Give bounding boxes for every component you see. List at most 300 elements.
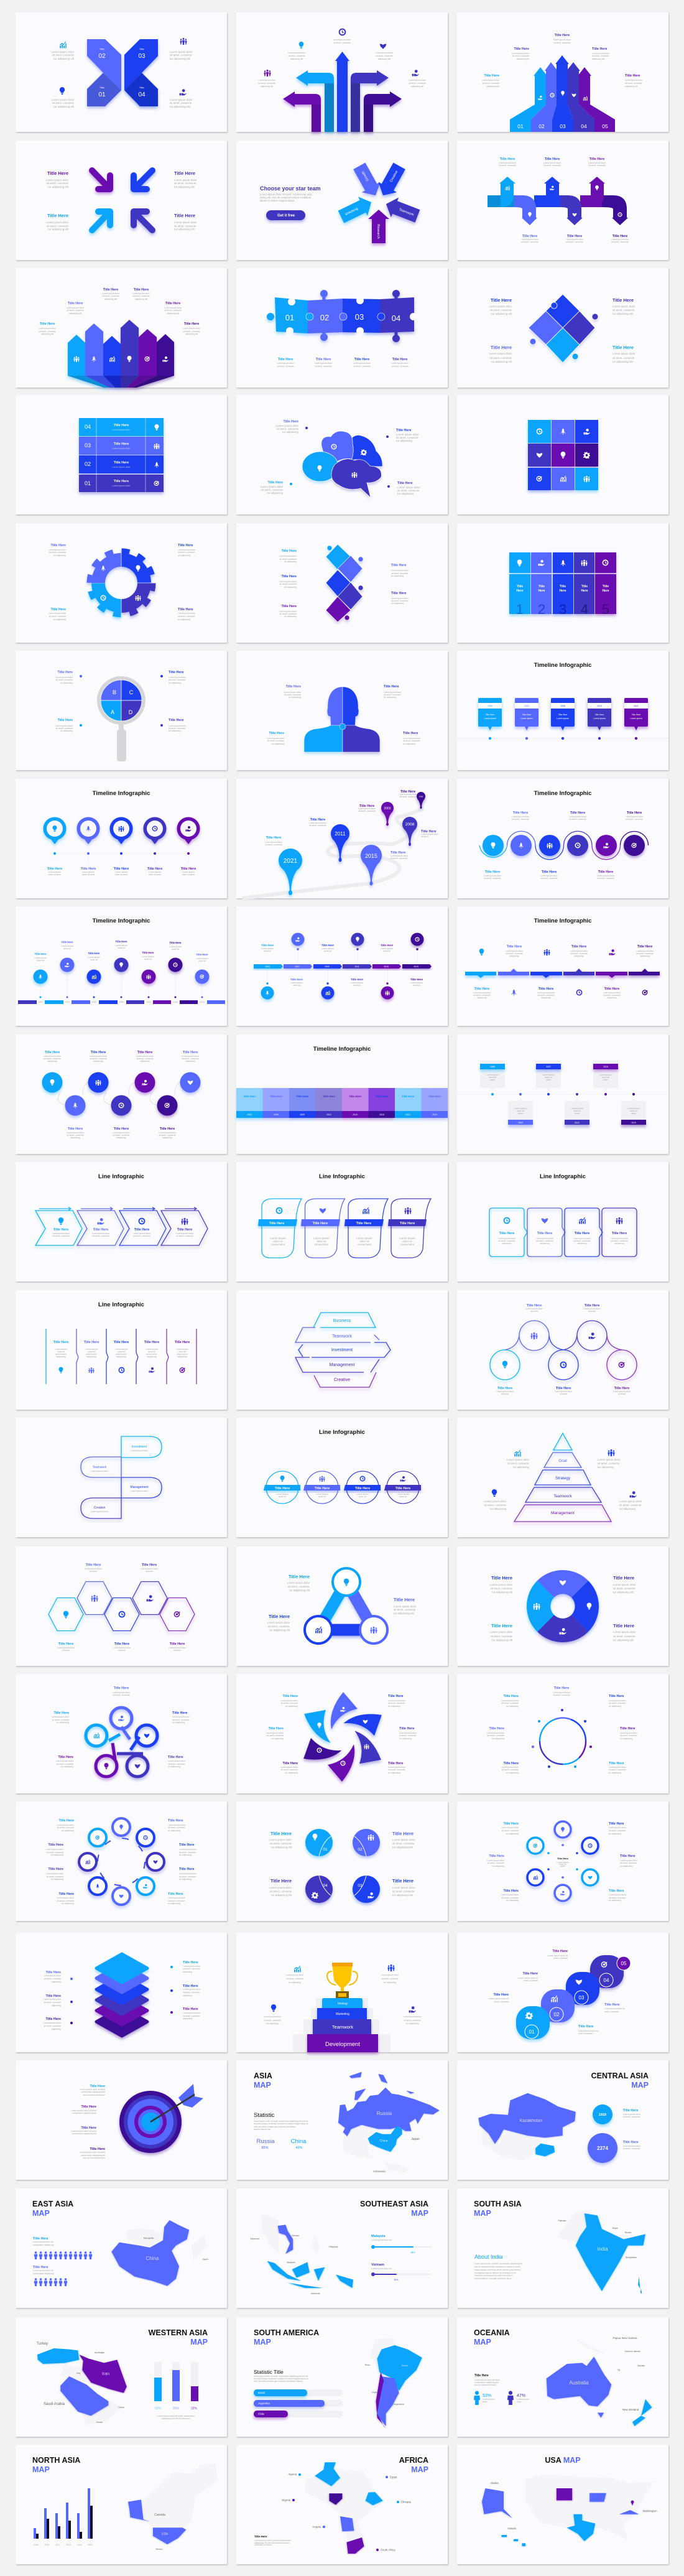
cards	[478, 698, 648, 730]
text block: tur adipiscing elit	[174, 185, 195, 188]
icon: handshake	[380, 44, 386, 49]
map labels: Ethiopia	[401, 2501, 411, 2503]
text block: Title Here	[178, 544, 193, 547]
text blocks: Lorem ipsum dolor	[487, 1732, 505, 1734]
band titles: Title Here	[269, 1222, 284, 1225]
text blocks: sit amet, consecte	[609, 1702, 626, 1704]
text blocks: Lorem ipsum dolor	[588, 162, 606, 164]
map labels: Solomon Islands	[624, 2350, 640, 2353]
map labels: Egypt	[390, 2476, 397, 2478]
text blocks: Title Here	[181, 867, 196, 871]
card text: 2021	[634, 705, 639, 707]
map labels: China	[146, 2256, 159, 2261]
icons	[266, 937, 420, 995]
text blocks: Lorem ipsum dolor	[284, 691, 302, 694]
text block: Lorem ipsum dolor	[489, 305, 512, 308]
text blocks: sit amet, consecte	[609, 1830, 626, 1832]
text blocks: Lorem ipsum dolor	[52, 1716, 70, 1718]
cards	[480, 1061, 646, 1128]
text blocks: sit amet, consecte	[309, 824, 326, 827]
text block: Title Here	[484, 74, 499, 78]
pill text: Lorem ipsum dolor	[91, 1510, 109, 1513]
statistic text: ullamco laboris nisi	[254, 2128, 270, 2131]
text blocks	[52, 1228, 194, 1237]
text blocks: Lorem ipsum dolor sit	[548, 1955, 568, 1957]
text blocks: sit amet, consecte	[636, 952, 654, 955]
text blocks: Title Here	[59, 1892, 74, 1896]
tier labels	[330, 1319, 354, 1382]
text blocks	[489, 1950, 568, 2003]
text blocks: sit amet, consecte	[168, 1826, 185, 1829]
text blocks: dolor sit	[402, 1240, 412, 1243]
text blocks	[391, 830, 439, 860]
step labels: 02	[98, 53, 106, 60]
text block: sit amet, consecte	[553, 42, 571, 44]
panel: six arrow columns	[16, 268, 228, 388]
text blocks: Lorem ipsum dolor	[176, 1232, 194, 1235]
years: 2021	[284, 858, 298, 865]
numbers: 02	[554, 2012, 560, 2017]
step labels: Step	[139, 86, 144, 89]
text block: Lorem ipsum dolor	[482, 79, 500, 81]
text block: sit amet, consecte	[270, 1842, 292, 1845]
text blocks: sit amet, consecte	[102, 295, 119, 297]
text block: Lorem ipsum dolor	[404, 2016, 422, 2018]
band titles: Title Here	[275, 1487, 290, 1490]
text block: Lorem ipsum dolor	[553, 1691, 571, 1694]
tier labels: Teamwork	[332, 1334, 352, 1339]
stats: 43%	[295, 2146, 303, 2150]
panel: puzzle grid	[457, 395, 669, 515]
stat: 53%: Lorem ipsum	[483, 2398, 495, 2401]
tier labels: Development	[325, 2041, 360, 2048]
text blocks: dolor sit	[324, 950, 331, 952]
card text: Title Here	[632, 714, 640, 716]
stat: 53%	[474, 2391, 495, 2405]
map	[338, 2072, 440, 2172]
map labels	[612, 2337, 645, 2411]
text block: Title Here	[33, 2266, 48, 2269]
column text: Here	[559, 589, 566, 593]
text blocks: tur adipiscing	[169, 730, 181, 732]
text block	[174, 213, 197, 231]
panel: brain puzzle	[236, 395, 448, 515]
text blocks: adipiscing elit	[135, 298, 147, 300]
text blocks: sit amet, consecte	[183, 1991, 200, 1994]
text block: sit amet, consecte	[396, 436, 418, 439]
map labels: Bangladesh	[626, 2256, 637, 2259]
panel: segmented ring	[457, 1674, 669, 1794]
bar chart: 32%	[191, 2407, 198, 2411]
letters: B	[113, 689, 116, 695]
numbers: 02	[358, 1848, 363, 1852]
pinwheel blades	[297, 1692, 389, 1782]
map labels: Iraq	[76, 2372, 80, 2374]
text block: sit amet, consecte	[490, 309, 512, 312]
letters: C	[129, 689, 134, 695]
text blocks: sit amet, consecte	[502, 1769, 519, 1771]
text blocks: sit amet, consecte	[44, 1058, 61, 1060]
text blocks: sit amet, consecte	[488, 1862, 504, 1864]
panel: line chevrons	[16, 1162, 228, 1283]
text blocks: sit amet, consecte	[90, 1058, 107, 1060]
text block: sit amet, consecte	[397, 489, 420, 492]
base band: 1990	[65, 1001, 70, 1003]
band titles: Title Here	[356, 1222, 371, 1225]
text blocks: Lorem ipsum dolor	[179, 1848, 197, 1851]
text blocks	[498, 1232, 629, 1245]
text blocks: adipiscing elit	[69, 312, 81, 315]
text blocks: dolor sit	[37, 959, 44, 962]
text block: sit amet, consecte	[483, 82, 499, 85]
text blocks: Title Here	[485, 870, 500, 874]
icons	[492, 1449, 636, 1497]
text blocks: Lorem ipsum	[276, 1493, 289, 1495]
years: 2015	[365, 853, 377, 859]
about text: About India	[474, 2254, 503, 2260]
text blocks: Lorem ipsum dolor	[55, 725, 73, 727]
text blocks: dolor sit amet	[82, 873, 95, 876]
letters: D	[129, 709, 133, 715]
about text: reprehenderit in voluptate velit esse cillum	[474, 2277, 512, 2280]
text blocks	[279, 549, 297, 618]
text block: sit amet, consecte	[376, 55, 393, 57]
bar chart: Argentina	[258, 2402, 270, 2405]
text blocks: Lorem ipsum	[270, 1237, 286, 1240]
text blocks: sit amet, consecte	[399, 1734, 416, 1737]
numbers: 01	[323, 1848, 328, 1852]
text blocks: sit amet, consecte	[603, 994, 621, 997]
text blocks: sit amet, consecte	[113, 1134, 130, 1137]
panel: africa map	[236, 2445, 448, 2565]
map labels: Chile	[371, 2391, 377, 2394]
text blocks: sit amet, consecte	[179, 1876, 196, 1878]
text blocks: Title Here	[290, 978, 303, 981]
text blocks: adipiscing	[477, 997, 487, 999]
text blocks: Title Here	[354, 358, 369, 361]
text blocks: Title Here	[612, 235, 627, 238]
text blocks: sit amet, consecte	[609, 1769, 626, 1771]
text block: sit amet, consecte	[286, 1978, 303, 1980]
map labels: Washington	[642, 2509, 657, 2513]
tier labels: Creative	[334, 1378, 350, 1382]
text blocks: dolor sit	[118, 947, 125, 949]
text blocks: Title Here	[620, 1854, 635, 1858]
text blocks: Title Here	[68, 302, 83, 305]
statistic text: Statistic Title	[254, 2369, 284, 2375]
wave line	[479, 831, 648, 860]
text blocks: adipiscing	[177, 1355, 187, 1358]
text block: Lorem ipsum dolor	[394, 1605, 417, 1608]
bar chart	[254, 2389, 343, 2417]
card text: 2015	[597, 705, 602, 707]
column text: 5	[602, 602, 609, 617]
map	[482, 2475, 654, 2546]
column text: Title	[517, 585, 523, 588]
map labels: Nepal	[612, 2227, 618, 2230]
text blocks: tur adipiscing	[609, 1833, 621, 1835]
heading: MAP	[474, 2338, 491, 2346]
slider: Vietnam	[371, 2263, 432, 2281]
text blocks	[473, 945, 654, 999]
text blocks: Lorem ipsum	[290, 982, 303, 984]
text blocks: Title Here	[504, 1822, 519, 1826]
panel: south america map	[236, 2317, 448, 2437]
text blocks: Lorem ipsum dolor	[501, 1826, 519, 1829]
heading: Timeline Infographic	[534, 662, 591, 669]
text blocks: Lorem ipsum dolor	[168, 1824, 186, 1826]
text blocks: Lorem ipsum dolor	[388, 1766, 406, 1769]
text block	[394, 1597, 417, 1615]
text block: sit amet, consecte	[170, 101, 192, 105]
text blocks: sit amet, consecte	[169, 679, 185, 681]
bar chart: 85%	[173, 2407, 180, 2411]
map	[111, 2220, 206, 2286]
icons	[101, 565, 141, 601]
card text: 1990	[488, 705, 492, 707]
text block	[170, 98, 193, 108]
text block: Lorem ipsum dolor	[276, 424, 299, 427]
text block	[333, 39, 351, 44]
text block: sit amet, consecte	[288, 1585, 310, 1588]
trophy	[327, 1963, 358, 1998]
text blocks: consectetur	[400, 1243, 415, 1246]
text blocks: Title Here	[160, 1127, 175, 1131]
band years: 2015	[384, 965, 389, 968]
text blocks: adipiscing	[607, 997, 617, 999]
text blocks: sit amet, consecte	[488, 1734, 504, 1737]
text blocks: sit amet, consecte	[391, 365, 409, 368]
text blocks: adipiscing	[614, 1242, 624, 1245]
text blocks	[391, 564, 409, 605]
text blocks: Title Here	[90, 2085, 105, 2088]
text blocks: sit amet, consecte	[133, 1235, 150, 1237]
text blocks: sed do eiusmod tempor	[83, 2094, 106, 2096]
text blocks: Title Here	[623, 2109, 638, 2113]
text block: tur adipiscing	[266, 2022, 279, 2025]
text blocks: Title Here	[381, 944, 394, 947]
text blocks: amet, consecte	[524, 1979, 538, 1982]
card text: Lorem ipsum	[542, 1074, 555, 1076]
text block: sit amet, consecte	[381, 1978, 399, 1980]
text block: Lorem ipsum dolor	[174, 179, 197, 182]
text blocks: Lorem ipsum dolor	[113, 1647, 131, 1649]
base band: 2008	[173, 1001, 178, 1003]
panel: asia map	[236, 2060, 448, 2181]
stat numbers	[597, 2113, 608, 2151]
map labels	[373, 2111, 420, 2173]
text blocks: Lorem ipsum dolor	[44, 1998, 62, 2001]
text blocks: adipiscing	[540, 1242, 550, 1245]
text blocks: Title Here	[589, 157, 604, 161]
text blocks: Lorem ipsum	[88, 956, 100, 959]
text blocks: sit amet	[618, 1393, 626, 1395]
numbers: 03	[355, 312, 364, 322]
text block: tur adipiscing elit	[289, 1589, 310, 1592]
text blocks: sit amet, consecte	[626, 818, 643, 821]
text blocks: Title Here	[142, 951, 154, 954]
text blocks: sit amet, consecte	[57, 1900, 74, 1902]
text block: consectetur adipiscing	[33, 2272, 54, 2275]
arrow band	[254, 964, 432, 969]
text blocks: sit amet, consecte	[281, 1769, 298, 1771]
panel: southeast asia map	[236, 2188, 448, 2309]
pins	[261, 933, 424, 999]
columns	[509, 552, 616, 614]
text blocks: Title Here	[570, 811, 585, 815]
step labels: 01	[98, 91, 106, 98]
numbers: 04	[604, 1978, 609, 1983]
centre text	[557, 1857, 569, 1867]
slider: Malaysia: 68%	[410, 2251, 415, 2254]
text block: tur adipiscing elit	[53, 105, 75, 108]
text blocks: Title Here	[144, 1341, 159, 1344]
text blocks: Title Here	[609, 1889, 624, 1893]
text blocks: sit amet, consecte	[623, 2116, 640, 2118]
map labels: Canada	[154, 2513, 165, 2517]
text blocks: Title Here	[58, 1755, 73, 1759]
years	[284, 795, 423, 865]
text blocks	[47, 867, 196, 876]
row text: Lorem ipsum dolor	[113, 466, 131, 468]
text blocks: Lorem ipsum dolor sit amet	[80, 2151, 105, 2154]
text blocks: sit amet, consecte	[183, 2015, 200, 2017]
text blocks: Lorem ipsum dolor	[46, 1872, 64, 1875]
text blocks: sit amet	[421, 835, 428, 838]
loops	[86, 1708, 157, 1777]
text blocks: tur adipiscing	[51, 1878, 63, 1881]
column text: Title Here	[376, 1095, 389, 1098]
text blocks	[34, 940, 208, 962]
text block: Title Here	[592, 47, 607, 51]
card text: amet	[631, 1112, 636, 1115]
heading: OCEANIA	[474, 2328, 510, 2337]
text blocks: sit amet, consecte	[512, 818, 529, 821]
text blocks: sit amet, consecte	[573, 1240, 591, 1242]
row bands	[79, 418, 164, 492]
text blocks: Lorem ipsum dolor	[353, 362, 371, 365]
text blocks: Title Here	[522, 235, 537, 238]
text block	[512, 47, 530, 60]
band years: 2003	[265, 965, 270, 968]
tier labels: Strategy	[338, 2002, 348, 2005]
heading: EAST ASIA	[32, 2200, 73, 2208]
text block: Title Here	[174, 170, 195, 176]
text blocks: Title Here	[316, 358, 331, 361]
statistic text: enim ad minim veniam quis nostrud exercitation ullamco	[254, 2380, 303, 2383]
text block: Lorem ipsum dolor	[174, 221, 197, 224]
text block: sit amet, consecte	[170, 53, 192, 57]
text blocks: adipiscing	[183, 2017, 192, 2020]
text blocks: Lorem ipsum dolor	[540, 875, 558, 877]
map labels: Vanuatu	[637, 2364, 645, 2367]
text blocks: Lorem ipsum	[356, 1237, 372, 1240]
text blocks: consectetur adipiscing elit	[81, 2091, 105, 2093]
stat: 53%: dolor	[483, 2401, 488, 2403]
numbers: 03	[579, 1995, 585, 2001]
text block	[170, 50, 193, 60]
heading: Timeline Infographic	[313, 1046, 371, 1053]
text blocks: Lorem ipsum	[261, 947, 274, 950]
number band: 02	[538, 123, 545, 129]
text blocks: adipiscing	[185, 1060, 195, 1062]
text block: sit amet, consecte	[619, 1504, 642, 1507]
text blocks: adipiscing	[574, 955, 584, 957]
text block: tur adipiscing elit	[392, 1846, 413, 1849]
text blocks: dolor sit	[353, 984, 361, 987]
text blocks: tur adipiscing	[399, 1737, 412, 1740]
text blocks	[266, 1695, 298, 1774]
text block: sit amet, consecte	[49, 551, 66, 554]
text block: adipiscing elit	[290, 58, 303, 60]
text blocks: Lorem ipsum dolor	[399, 793, 417, 796]
text blocks: Lorem ipsum dolor	[309, 822, 327, 824]
text block: Lorem ipsum dolor sit amet, consectetur	[157, 2415, 195, 2417]
text block	[490, 1575, 513, 1594]
markers	[292, 2473, 399, 2551]
text block	[612, 297, 635, 315]
text blocks	[52, 1711, 74, 1768]
text blocks: sit amet, consecte	[67, 309, 84, 312]
text block: sit amet, consecte	[268, 1625, 290, 1628]
base band: 1999	[119, 1001, 124, 1003]
bar chart: 65%	[155, 2407, 162, 2411]
pill text: Management	[130, 1486, 149, 1489]
text block: Lorem ipsum dolor	[178, 612, 196, 615]
row text: Title Here	[114, 461, 129, 465]
text blocks	[496, 1304, 631, 1395]
text block: Lorem ipsum dolor	[612, 352, 635, 355]
text blocks: Lorem ipsum dolor	[44, 1055, 62, 1058]
text blocks: Title Here	[494, 1993, 509, 1997]
text block: Lorem ipsum dolor	[490, 1630, 513, 1634]
band years: 2019	[414, 965, 418, 968]
text blocks: Title Here	[168, 1755, 183, 1759]
text blocks: Title Here	[556, 1387, 571, 1390]
heading: Choose your star team	[260, 185, 321, 192]
text blocks: Title Here	[282, 605, 297, 608]
text blocks: Title Here	[500, 157, 515, 161]
text block: adipiscing elit	[517, 58, 529, 60]
text blocks: Title Here	[410, 978, 423, 981]
text blocks: Title Here	[165, 302, 180, 305]
pill text: Teamwork	[93, 1466, 107, 1469]
text blocks: Lorem ipsum dolor sit amet	[71, 2109, 96, 2112]
text blocks	[384, 685, 421, 745]
panel: puzzle row	[236, 268, 448, 388]
text block: tur adipiscing	[267, 491, 284, 495]
panel: magnifier	[16, 651, 228, 771]
bar chart: Chile	[258, 2412, 265, 2416]
text blocks: Title Here	[504, 1889, 519, 1893]
column text: 2	[538, 602, 545, 617]
text blocks: Lorem ipsum dolor	[512, 816, 530, 818]
text blocks: Title Here	[114, 1341, 129, 1344]
panel: south asia map	[457, 2188, 669, 2309]
panel: full width band timeline	[236, 1035, 448, 1155]
text blocks: Lorem ipsum dolor	[168, 1897, 186, 1899]
text blocks: sit amet, consecte	[358, 810, 376, 812]
panel: line pills flow	[16, 1418, 228, 1538]
text blocks: Lorem ipsum dolor	[183, 1988, 201, 1991]
statistic text: Lorem ipsum dolor sit amet, consectetur adipiscing elit sed do	[254, 2375, 308, 2378]
about text: commodo consequat duis aute irure dolor in	[474, 2274, 513, 2277]
text block: tur adipiscing	[396, 439, 412, 442]
text block: sit amet, consecte	[277, 427, 299, 430]
text blocks: dolor sit	[359, 1495, 366, 1498]
heading	[149, 2328, 208, 2346]
text block: tur adipiscing elit	[174, 228, 195, 231]
